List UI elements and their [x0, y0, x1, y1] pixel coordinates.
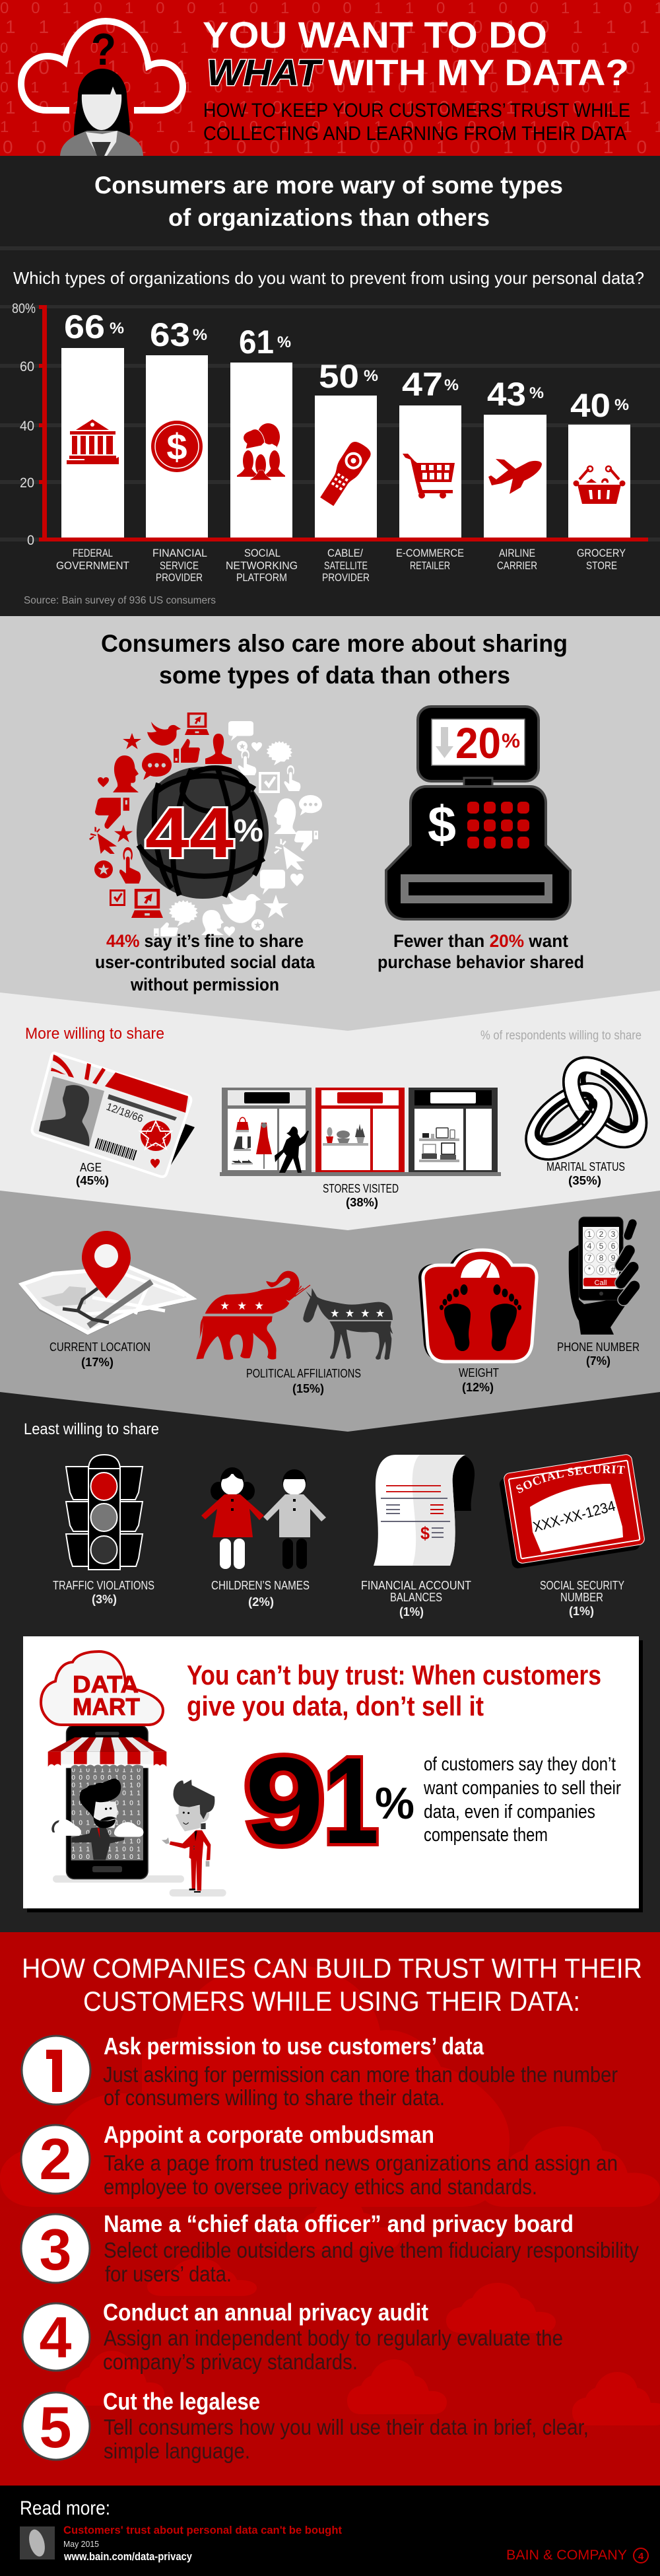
step 4: [22, 2299, 563, 2374]
text: 91 percent explanation: data, even if companies: [424, 1801, 595, 1823]
caption: 20 percent: [378, 931, 584, 972]
subtitle: COLLECTING AND LEARNING FROM THEIR DATA: [203, 123, 626, 145]
label: stores visited: STORES VISITED: [323, 1182, 399, 1195]
icon: grocery basket: [573, 466, 626, 504]
bars: [61, 348, 630, 538]
globe: [137, 767, 269, 899]
category labels: FEDERAL: [73, 547, 113, 559]
label: current location: (17%): [81, 1356, 114, 1369]
category labels: AIRLINE: [499, 547, 535, 559]
step 5: [22, 2388, 589, 2463]
white social icons: [154, 721, 322, 936]
article link: Customers' trust about personal data can't be bought: [63, 2524, 342, 2536]
icon: phone in hand: 5: [599, 1241, 604, 1251]
y axis labels: 60: [20, 359, 34, 374]
y axis labels: 0: [27, 533, 34, 548]
labels: least willing items: (3%): [92, 1593, 117, 1606]
icon: social security card: [500, 1454, 645, 1568]
bar values: %: [110, 320, 124, 337]
label: marital status: MARITAL STATUS: [546, 1160, 625, 1173]
icon: airplane: [488, 459, 542, 494]
icon: map with location pin: [20, 1231, 193, 1335]
article link: www.bain.com/data-privacy: [63, 2550, 192, 2563]
icon: dollar coin: $: [166, 426, 187, 468]
icon: traffic light: [66, 1455, 143, 1570]
bar values: 66: [64, 308, 105, 345]
icon: ID card: [32, 1053, 195, 1177]
title: YOU WANT TO DO: [203, 14, 547, 55]
icon: elephant and donkey: [196, 1271, 393, 1360]
category labels: PLATFORM: [236, 571, 287, 584]
labels: least willing items: TRAFFIC VIOLATIONS: [53, 1579, 154, 1592]
step 2: 2: [40, 2126, 71, 2192]
article link: May 2015: [63, 2539, 99, 2549]
step 2: Appoint a corporate ombudsman: [104, 2121, 434, 2148]
logo: Bain & Company: 4: [638, 2551, 644, 2562]
question text: Which types of organizations do you want to prevent from using your personal data?: [13, 268, 644, 288]
step 1: Ask permission to use customers’ data: [104, 2033, 484, 2060]
category labels: SERVICE: [160, 559, 199, 572]
bar chart: [12, 301, 648, 606]
background clouds: [0, 1965, 660, 2425]
icon: weighing scale: [418, 1249, 537, 1362]
panel: how companies can build trust: [0, 1932, 660, 2486]
label: weight: [459, 1366, 499, 1394]
title: WHAT: [207, 52, 323, 93]
illustration: data mart phone and men: 0 0 1 0 1 1 0 1 1 0: [71, 1838, 141, 1846]
category labels: RETAILER: [410, 559, 450, 572]
step 5: Tell consumers how you will use their data in brief, clear,: [104, 2415, 589, 2439]
bar values: 61: [239, 324, 274, 361]
step 1: [22, 2033, 618, 2110]
icon: social security card: XXX-XX-1234: [531, 1498, 617, 1535]
illustration: data mart phone and men: [48, 1725, 226, 1897]
category labels: SATELLITE: [324, 559, 368, 572]
step 2: [21, 2121, 618, 2199]
store 1: [222, 1088, 312, 1173]
label: stores visited: [323, 1182, 399, 1209]
illustration: data mart phone and men: 1 0 1 0 1 1 0 1 0 1: [71, 1799, 141, 1807]
icon: receipt: [374, 1455, 475, 1566]
labels: least willing items: (1%): [569, 1605, 594, 1618]
category labels: SOCIAL: [244, 547, 280, 559]
title: WITH MY DATA?: [328, 52, 629, 93]
step 3: [21, 2210, 639, 2286]
step 5: simple language.: [104, 2439, 250, 2463]
label: age: (45%): [76, 1174, 109, 1187]
step 1: of consumers willing to share their data.: [104, 2085, 445, 2110]
heading: organizations: Consumers are more wary of some types: [94, 172, 563, 199]
label: current location: [50, 1340, 150, 1369]
caption: 20 percent: Fewer than 20% want: [393, 931, 568, 951]
bar values: 43: [487, 376, 526, 413]
subtitle: [203, 100, 630, 145]
store 2: [315, 1088, 405, 1172]
text: 91 percent explanation: of customers say they don’t: [424, 1754, 616, 1775]
thumbnail: [20, 2526, 55, 2559]
icon: phone in hand: 3: [611, 1230, 616, 1239]
icon: social icons ring with globe: 44: [145, 792, 234, 872]
label: phone number: (7%): [586, 1354, 610, 1368]
step 2: employee to oversee privacy ethics and standards.: [104, 2175, 537, 2199]
category labels: PROVIDER: [322, 571, 370, 584]
caption: 44 percent: user-contributed social data: [95, 952, 315, 972]
label: marital status: [546, 1160, 625, 1187]
illustration: data mart phone and men: 0 1 0 1 1 1 0 1 1 0: [71, 1766, 141, 1774]
header panel: [0, 0, 660, 157]
icon: data mart cloud: DATA: [73, 1671, 139, 1698]
bar values: %: [193, 326, 207, 344]
heading: organizations: [94, 172, 563, 231]
icon: cash register: %: [502, 729, 520, 752]
label: political affiliations: (15%): [292, 1382, 324, 1395]
bar values: %: [614, 396, 629, 414]
logo: Bain & Company: BAIN & COMPANY: [506, 2548, 627, 2563]
labels: least willing items: FINANCIAL ACCOUNT: [361, 1579, 471, 1592]
step 5: 5: [40, 2394, 71, 2460]
y axis labels: [12, 301, 36, 548]
stat: 91 percent: 1: [323, 1733, 379, 1869]
icon: phone in hand: 0: [599, 1265, 604, 1274]
store 3: [409, 1088, 498, 1172]
heading: data types: Consumers also care more about sharing: [101, 630, 568, 657]
heading: can't buy trust: give you data, don’t sell it: [187, 1690, 484, 1722]
icon: social security card: SOCIAL SECURITY: [516, 1465, 625, 1494]
illustration: data mart phone and men: 1 0 1 1 0 0 1 0 1 0: [71, 1819, 141, 1827]
category labels: [56, 547, 626, 584]
red social icons: [89, 713, 232, 918]
icon: social icons ring with globe: [89, 713, 322, 936]
label: stores visited: (38%): [346, 1196, 378, 1209]
icon: phone in hand: *: [588, 1265, 591, 1274]
label: phone number: [557, 1340, 640, 1368]
illustration: data mart phone and men: 0 1 1 1 0 0 0 1 1 0: [71, 1782, 141, 1790]
step 4: Assign an independent body to regularly evaluate the: [104, 2326, 563, 2350]
heading: how companies: [22, 1953, 642, 2017]
illustration: data mart phone and men: 1 1 0 1 1 0 0 1 0 1: [71, 1829, 141, 1836]
illustration: data mart phone and men: 1 1 1 0 1 1 1 0 0 1: [71, 1846, 141, 1853]
stat: 91 percent: %: [375, 1778, 414, 1828]
step 4: Conduct an annual privacy audit: [103, 2299, 428, 2326]
icon: phone in hand: 1: [587, 1230, 592, 1239]
category labels: NETWORKING: [226, 559, 298, 572]
icon: social icons ring with globe: %: [234, 814, 263, 849]
text: 91 percent explanation: want companies to sell their: [423, 1778, 621, 1799]
caption: 20 percent: purchase behavior shared: [378, 952, 584, 972]
stat: 91 percent: 9: [245, 1733, 324, 1869]
illustration: data mart phone and men: 0 0 0 1 1 0 0 1 0 1: [71, 1854, 141, 1861]
panel: organizations background: [0, 156, 660, 616]
step 4: company’s privacy standards.: [103, 2350, 358, 2374]
step 5: Cut the legalese: [103, 2388, 260, 2415]
icon: cash register: 20: [455, 718, 501, 767]
icon: shopping cart: [403, 454, 455, 499]
man in red suit: [162, 1780, 214, 1893]
axes: [39, 305, 648, 541]
stat: 91 percent: [245, 1733, 414, 1869]
caption: 44 percent: without permission: [130, 975, 279, 994]
step 3: 3: [40, 2217, 71, 2282]
category labels: CABLE/: [327, 547, 363, 559]
heading: data types: some types of data than others: [159, 662, 510, 689]
label: age: [76, 1161, 109, 1187]
icon: phone in hand: #: [611, 1265, 616, 1274]
label: weight: (12%): [462, 1381, 494, 1394]
bar values: [64, 308, 629, 424]
category labels: PROVIDER: [156, 571, 203, 584]
icon: ID card: 12/18/66: [105, 1101, 145, 1125]
text: 91 percent explanation: compensate them: [424, 1825, 548, 1846]
labels: least willing items: (1%): [399, 1605, 424, 1619]
bar values: 47: [402, 366, 443, 403]
footer: [0, 2486, 660, 2576]
title: [203, 14, 629, 93]
icon: phone in hand: 9: [611, 1253, 616, 1263]
label: respondents: % of respondents willing to share: [480, 1029, 642, 1043]
label: marital status: (35%): [568, 1174, 601, 1187]
step 3: for users’ data.: [105, 2262, 232, 2286]
icon: phone in hand: 6: [611, 1241, 616, 1251]
icon: cloud with question mark and woman: ?: [91, 24, 116, 75]
icon: cloud with question mark and woman: [21, 21, 183, 156]
label: more willing: More willing to share: [25, 1025, 164, 1043]
label: phone number: PHONE NUMBER: [557, 1340, 640, 1354]
bar values: %: [364, 367, 378, 385]
icon: bank: [67, 419, 119, 464]
icon: phone in hand: 4: [587, 1241, 592, 1251]
icon: data mart cloud: [41, 1652, 163, 1725]
label: political affiliations: POLITICAL AFFILIATIONS: [246, 1367, 361, 1380]
labels: least willing items: BALANCES: [390, 1591, 442, 1604]
bar values: %: [529, 384, 544, 402]
category labels: E-COMMERCE: [396, 547, 464, 559]
icon: remote control: [317, 438, 374, 508]
icon: wedding rings: [523, 1053, 652, 1164]
labels: least willing items: CHILDREN’S NAMES: [211, 1579, 310, 1592]
panel: less-willing band backgrounds: [0, 991, 660, 1932]
icon: cash register: $: [428, 795, 456, 853]
icon: phone in hand: [569, 1217, 643, 1335]
labels: least willing items: [53, 1579, 624, 1619]
step 3: Name a “chief data officer” and privacy board: [104, 2210, 574, 2237]
icon: social network people: [237, 423, 285, 480]
icon: cash register: [386, 707, 570, 919]
y axis labels: 20: [20, 475, 34, 491]
y axis labels: 80%: [12, 301, 36, 316]
icon: phone in hand: 2: [599, 1230, 604, 1239]
label: least willing: Least willing to share: [24, 1420, 159, 1438]
label: political affiliations: [246, 1367, 361, 1395]
illustration: data mart phone and men: 1 1 0 1 0 1 0 0 1 1: [71, 1790, 141, 1797]
man in phone: [51, 1778, 143, 1860]
illustration: data mart phone and men: 0 0 0 0 0 0 1 0 1 0: [71, 1774, 141, 1782]
caption: 44 percent: [95, 931, 315, 994]
heading: organizations: of organizations than others: [168, 204, 490, 231]
y axis labels: 40: [20, 419, 34, 434]
labels: least willing items: NUMBER: [560, 1591, 603, 1604]
label: age: AGE: [80, 1161, 102, 1174]
icon: phone in hand: 7: [587, 1253, 592, 1263]
icon: three storefronts: [220, 1088, 501, 1176]
bar values: 40: [570, 387, 610, 424]
awning: [48, 1737, 166, 1768]
icon: phone in hand: 8: [599, 1253, 604, 1263]
labels: least willing items: SOCIAL SECURITY: [540, 1579, 624, 1592]
label: weight: WEIGHT: [459, 1366, 499, 1379]
label: current location: CURRENT LOCATION: [50, 1340, 150, 1354]
category labels: GOVERNMENT: [56, 559, 129, 572]
text: 91 percent explanation: [423, 1754, 621, 1846]
icon: data mart cloud: MART: [73, 1693, 140, 1720]
icon: two children: [201, 1467, 326, 1569]
step 4: 4: [40, 2305, 72, 2370]
panel: data mart: [23, 1636, 643, 1912]
read more: Read more:: [20, 2497, 110, 2519]
icon: receipt: $: [420, 1523, 430, 1543]
category labels: GROCERY: [577, 547, 626, 559]
bar values: 63: [150, 316, 190, 353]
icon: phone in hand: Call: [595, 1279, 607, 1287]
bar values: 50: [319, 358, 359, 395]
heading: can't buy trust: [187, 1659, 601, 1722]
heading: data types: [101, 630, 568, 689]
article link: [63, 2524, 342, 2563]
category labels: STORE: [586, 559, 617, 572]
category labels: FINANCIAL: [152, 547, 207, 559]
labels: least willing items: (2%): [248, 1595, 274, 1609]
bar values: %: [444, 376, 459, 394]
caption: 44 percent: 44% say it’s fine to share: [106, 931, 304, 951]
category labels: CARRIER: [497, 559, 537, 572]
panel: data types background: [0, 616, 660, 1039]
illustration: data mart phone and men: 0 1 0 0 1 0 0 1 1 1: [71, 1809, 141, 1817]
source: Source: Bain survey of 936 US consumers: [24, 595, 216, 606]
heading: how companies: CUSTOMERS WHILE USING THEIR DATA:: [83, 1986, 580, 2017]
icon: dollar coin: [151, 421, 203, 472]
bar values: %: [277, 333, 291, 351]
